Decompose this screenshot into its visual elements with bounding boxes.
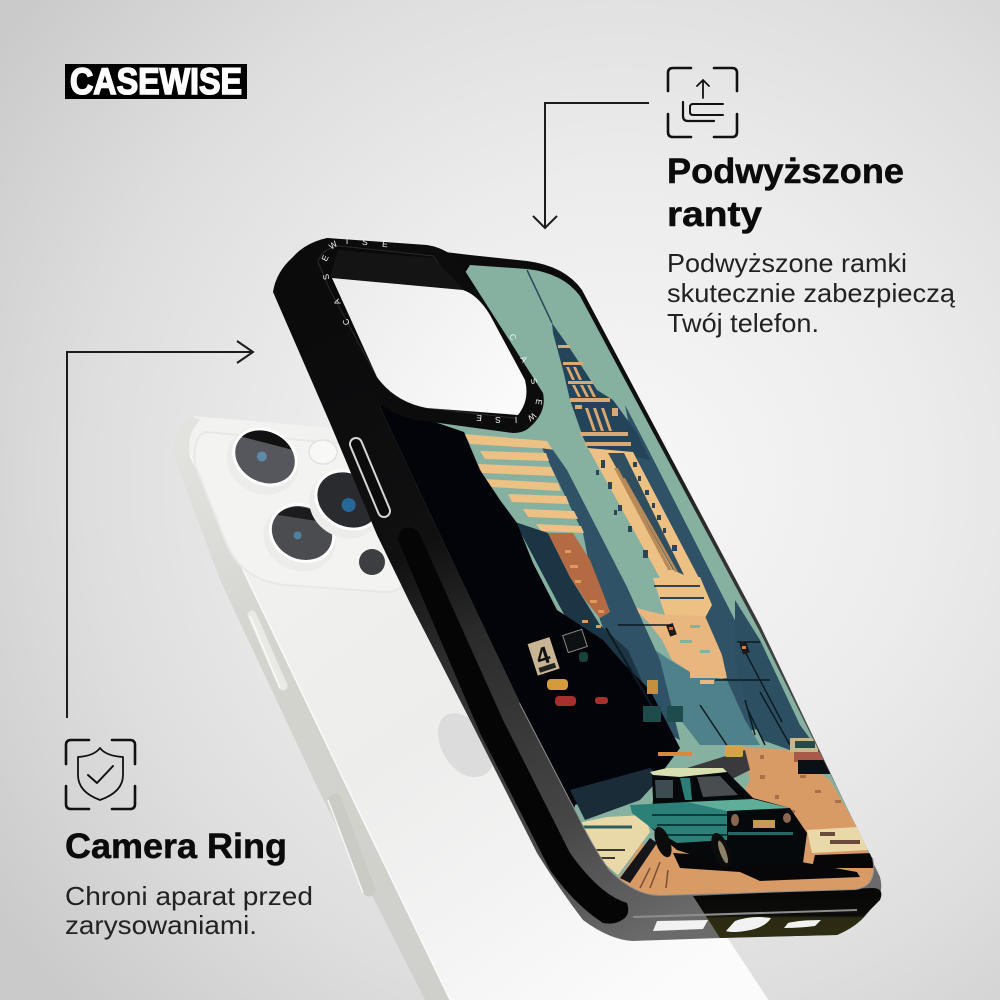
heading: raised edges: Podwyższone: [667, 152, 904, 191]
case lower right dark corner: [693, 888, 881, 938]
ring lettering: E: [382, 239, 389, 249]
flash: [309, 440, 337, 464]
lens lower: [252, 491, 348, 583]
icon: raised edges: [668, 68, 737, 137]
crosswalk: [578, 815, 868, 875]
right side buildings: [735, 600, 822, 755]
ring lettering: W: [526, 411, 538, 423]
black case: [273, 238, 881, 941]
ring lettering: S: [528, 377, 540, 386]
car wheels: [654, 826, 672, 858]
camera bump: [194, 432, 405, 592]
text: camera ring description: zarysowaniami.: [65, 910, 257, 940]
lens top: [215, 415, 311, 507]
icon: shield: [66, 740, 135, 809]
teal car: [630, 768, 807, 870]
apple logo: [438, 713, 493, 777]
skyscraper main body: [588, 448, 700, 580]
black building silhouette: [370, 400, 680, 830]
street poles and lights: [606, 625, 790, 750]
ring lettering: A: [331, 297, 343, 307]
distant car right: [790, 738, 830, 774]
skyscraper shadow: [625, 405, 756, 730]
street signs: 4: [533, 641, 554, 671]
text: raised edges description: Podwyższone ramki: [667, 248, 907, 278]
car shadow: [673, 853, 860, 881]
left tower dark shadow: [542, 448, 680, 740]
volume button: [356, 444, 384, 511]
peach striped building: [464, 434, 584, 533]
ring inner wall: [330, 250, 465, 291]
ring lettering: E: [319, 253, 331, 263]
side buttons: [250, 615, 369, 893]
white phone: [172, 415, 775, 1000]
skyscraper base: [653, 577, 712, 618]
lower dark street strip: [570, 768, 662, 820]
spire: [527, 270, 552, 323]
ring lettering: I: [346, 236, 348, 246]
heading: raised edges: ranty: [667, 195, 763, 234]
case side slot: [398, 528, 628, 924]
peach haze: [633, 607, 727, 680]
ring lettering: A: [518, 354, 530, 364]
case highlight line: [633, 910, 857, 917]
ring lettering: I: [515, 415, 517, 425]
arrow: top callout: [533, 103, 649, 228]
dark blue mid buildings: [516, 522, 643, 683]
skyscraper upper: [552, 323, 650, 460]
taxi: [725, 745, 743, 757]
lidar: [359, 549, 385, 575]
street signs: [528, 629, 692, 756]
ring opening: [332, 278, 526, 415]
ring lettering: E: [475, 413, 482, 423]
arrow: left callout: [67, 341, 253, 718]
heading: camera ring: Camera Ring: [65, 827, 287, 866]
ring lettering: S: [362, 237, 369, 247]
ring lettering: S: [495, 415, 501, 425]
lens right: [297, 456, 395, 551]
traffic lights: [666, 623, 750, 655]
camera ring: [315, 236, 544, 433]
text: camera ring description: Chroni aparat przed: [65, 881, 313, 911]
heading: raised edges: [667, 152, 904, 234]
ring lettering: C: [340, 317, 352, 327]
text: raised edges description: skutecznie zabezpieczą: [667, 278, 956, 308]
ring lettering: W: [327, 239, 339, 251]
case artwork: pixel city: [370, 250, 890, 910]
ring lettering: E: [534, 398, 544, 406]
ring lettering: S: [320, 273, 332, 281]
car plate and lamps: [753, 820, 775, 828]
orange building: [548, 533, 610, 618]
haze street sky: [656, 650, 760, 745]
ring lettering: C: [507, 332, 519, 342]
brand logo: CASEWISE: [70, 61, 242, 102]
case inner rim: [520, 703, 873, 895]
text: raised edges description: [667, 248, 956, 338]
ring lettering: [319, 236, 544, 425]
charging ports: [653, 917, 821, 932]
road: [618, 747, 874, 895]
text: camera ring description: [65, 881, 313, 940]
text: raised edges description: Twój telefon.: [667, 308, 819, 338]
